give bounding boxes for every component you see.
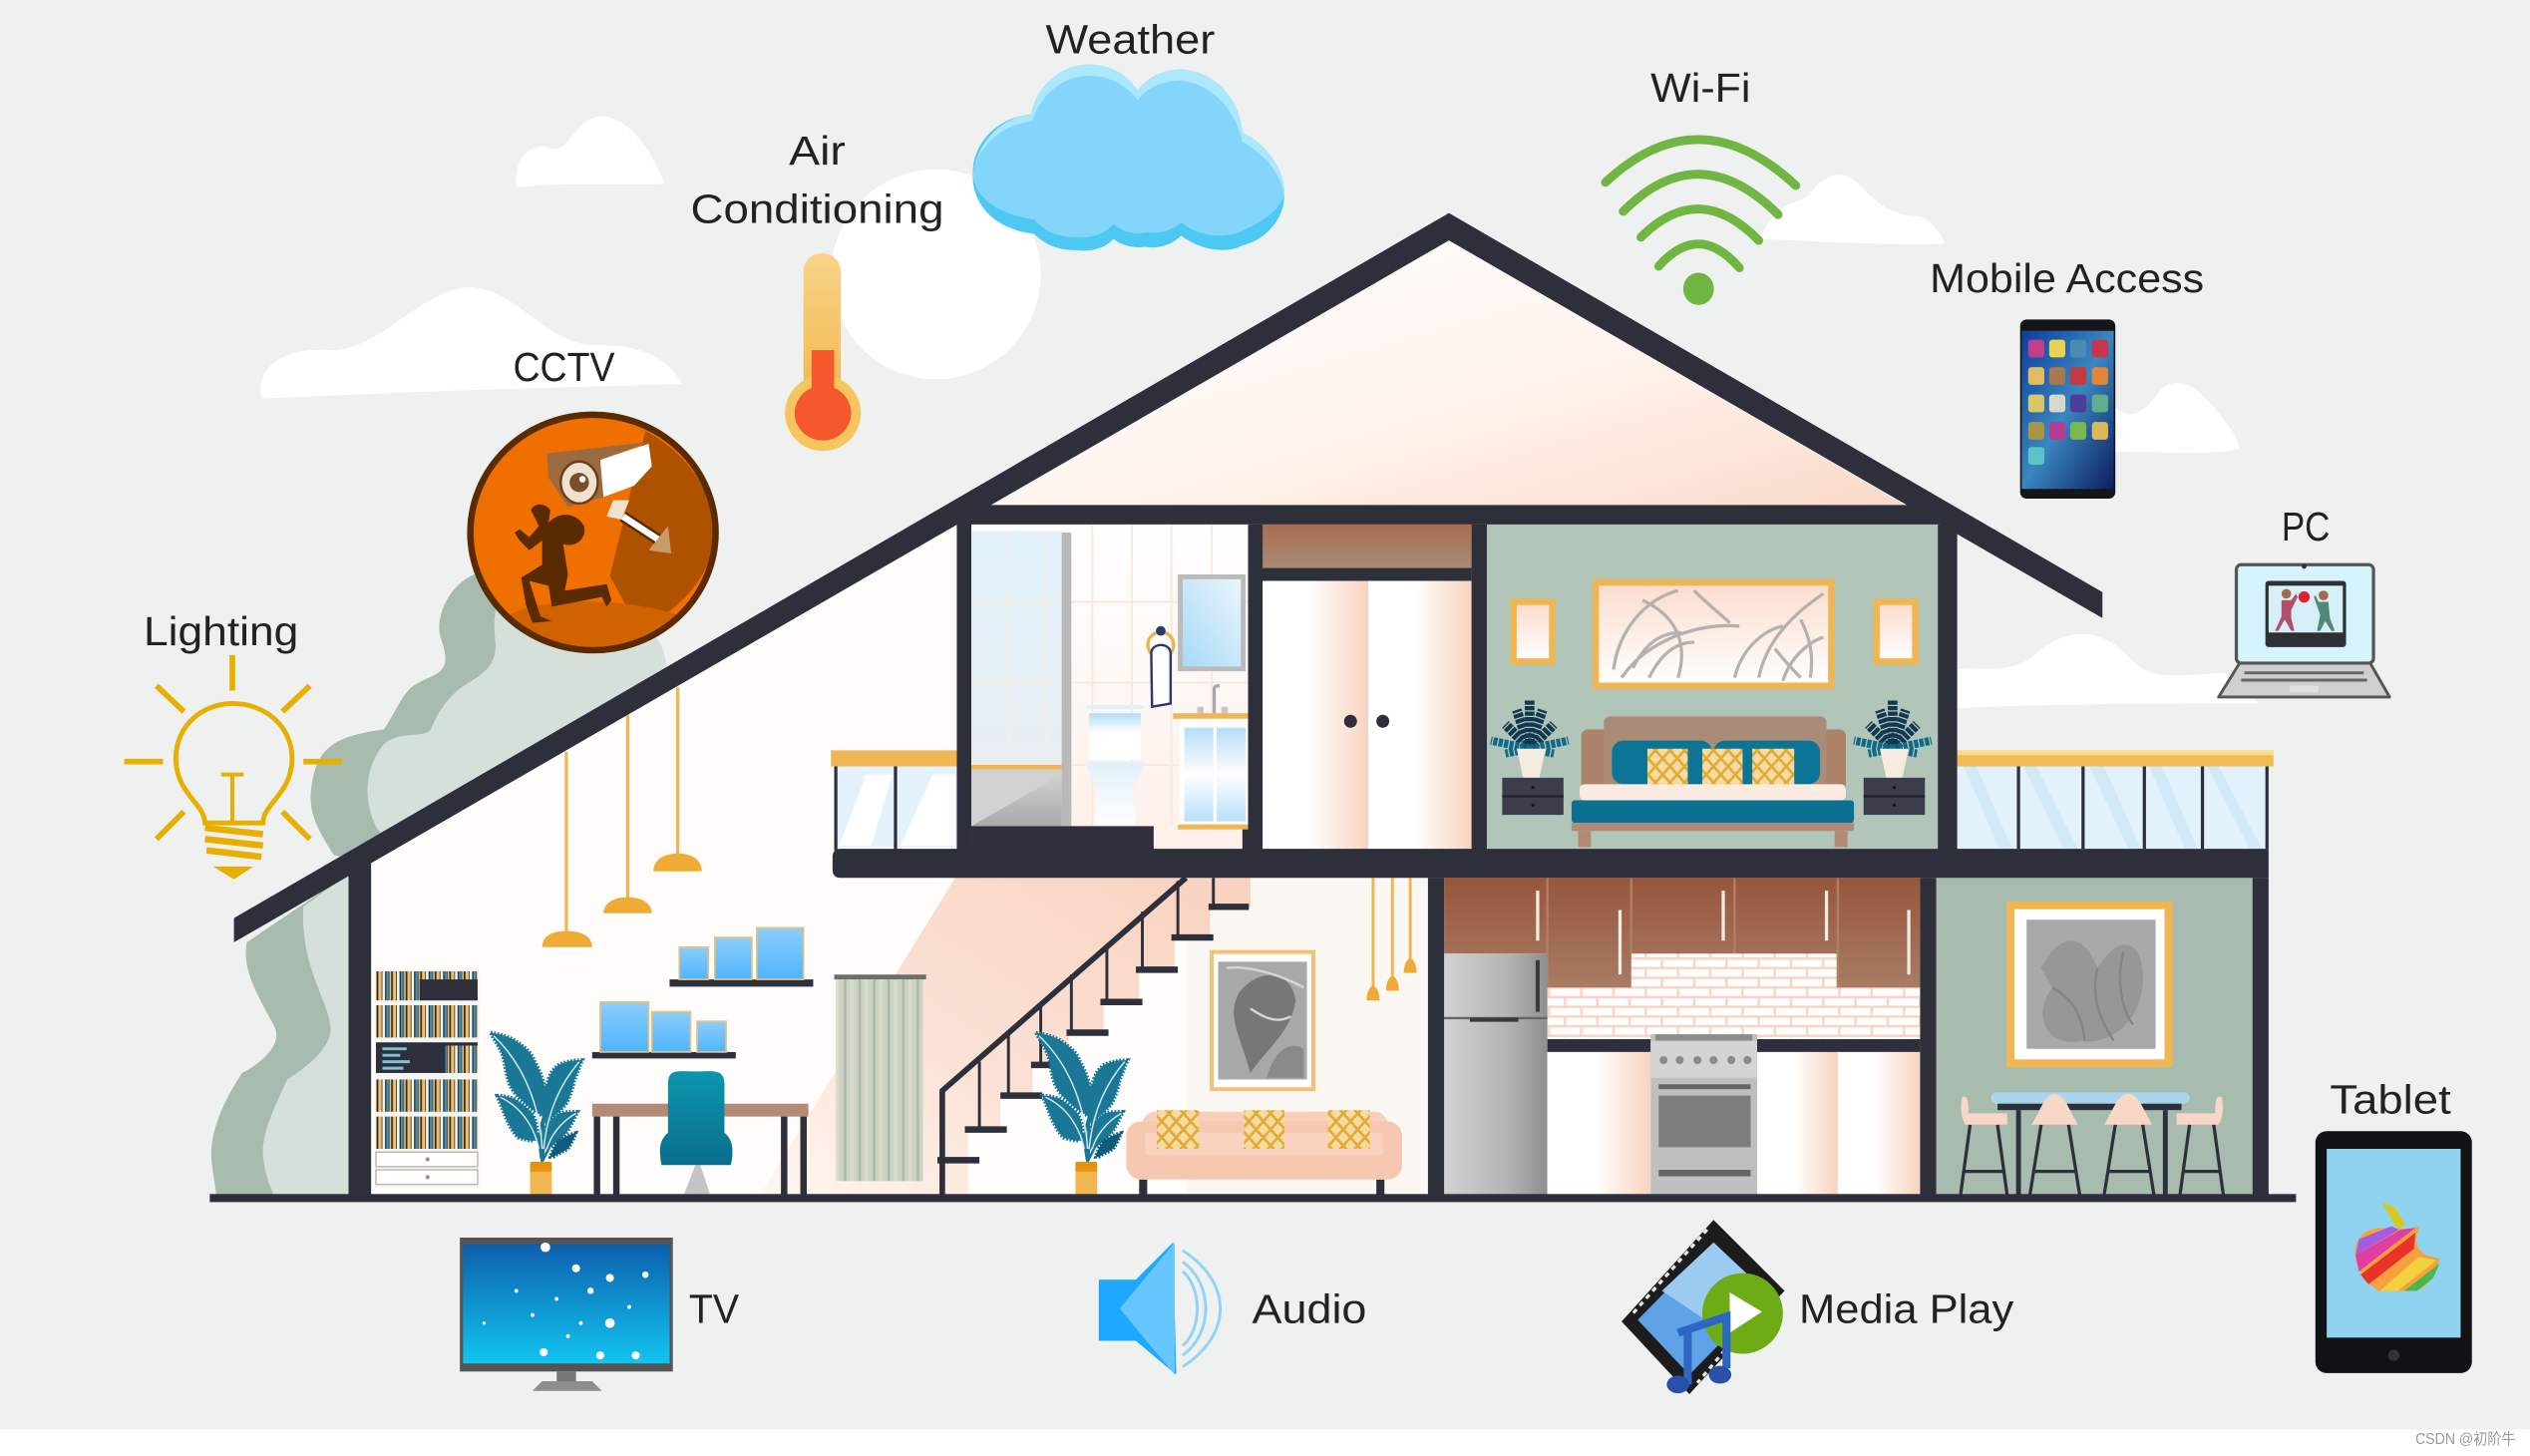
house interior walls: [371, 522, 1428, 1198]
label: Media Play: Media Play: [1799, 1286, 2014, 1332]
bed: [1572, 716, 1854, 847]
icon: CCTV badge: [471, 415, 716, 650]
curtain: [834, 974, 926, 1181]
shower: [971, 531, 1071, 826]
toilet: [1086, 705, 1144, 826]
label: PC: PC: [2282, 504, 2330, 549]
label: Lighting: Lighting: [144, 608, 298, 654]
living room painting: [1212, 952, 1313, 1089]
background clouds: [260, 117, 2259, 708]
wall shelves with frames: [592, 927, 813, 1058]
icon: thermometer: [785, 253, 861, 451]
bedside plant left: [1491, 700, 1569, 815]
attic beam and walls: [963, 505, 1945, 525]
bedroom floral painting: [1596, 582, 1831, 686]
vanity: [1173, 686, 1249, 830]
pendant lamps: [542, 687, 702, 947]
label: CCTV: CCTV: [514, 344, 614, 390]
icon: television: [460, 1238, 673, 1391]
left balcony: [831, 750, 956, 851]
fridge: [1444, 953, 1548, 1196]
bathroom: [971, 525, 1249, 849]
label: Air Conditioning: [690, 128, 944, 231]
backsplash: [1548, 953, 1920, 1037]
label: Weather: Weather: [1045, 16, 1215, 62]
ground line: [209, 1194, 2296, 1202]
desk and chair: [592, 1071, 809, 1196]
icon: tablet: [2316, 1131, 2472, 1373]
small frames: [1514, 602, 1553, 661]
right balcony: [1958, 750, 2274, 849]
sofa: [1126, 1110, 1402, 1196]
small pendant lights: [1366, 878, 1417, 1000]
icon: smartphone: [2020, 319, 2115, 499]
attic: [990, 240, 1907, 507]
label: Air Conditioning: Air: [789, 128, 846, 174]
roof: [234, 213, 2102, 942]
plant by stairs: [1036, 1033, 1128, 1196]
lawn bushes behind house: [211, 574, 666, 1198]
towel holder: [1148, 626, 1174, 707]
label: TV: TV: [689, 1286, 739, 1332]
wall cabinets: [1444, 878, 1920, 987]
icon: speaker: [1099, 1243, 1221, 1375]
dining table: [1991, 1092, 2190, 1196]
icon: light bulb: [125, 655, 342, 880]
bedside plant right: [1854, 700, 1932, 815]
dining painting: [2010, 906, 2169, 1063]
plant by desk: [491, 1033, 582, 1196]
ground-floor walls: [348, 864, 371, 1196]
icon: wifi: [1606, 140, 1796, 305]
icon: laptop: [2219, 563, 2389, 697]
label: Audio: Audio: [1253, 1286, 1366, 1332]
camera: [546, 442, 671, 553]
house frame: [209, 213, 2296, 1202]
living room: bookshelf: [374, 969, 480, 1188]
label: Air Conditioning: Conditioning: [690, 185, 944, 231]
rainbow apple: [2354, 1202, 2439, 1290]
bedroom: [1486, 525, 1938, 849]
label: Tablet: Tablet: [2330, 1076, 2451, 1122]
icon: weather cloud: [972, 65, 1284, 250]
counter: [1548, 1039, 1920, 1052]
base cabinets: [1548, 1052, 1920, 1196]
label: Mobile Access: Mobile Access: [1930, 255, 2204, 301]
kitchen: [1444, 878, 1920, 1196]
mid floor: [833, 849, 2269, 878]
stove: [1650, 1034, 1757, 1196]
thief: [515, 505, 611, 623]
icon: media play: [1622, 1220, 1784, 1394]
dining room: [1937, 878, 2253, 1196]
staircase: [937, 878, 1249, 1198]
label: Wi-Fi: Wi-Fi: [1650, 65, 1751, 111]
watermark: CSDN @初阶牛: [2415, 1430, 2515, 1448]
wardrobe: [1262, 525, 1472, 849]
mirror: [1181, 576, 1244, 669]
stools: [1961, 1094, 2224, 1196]
